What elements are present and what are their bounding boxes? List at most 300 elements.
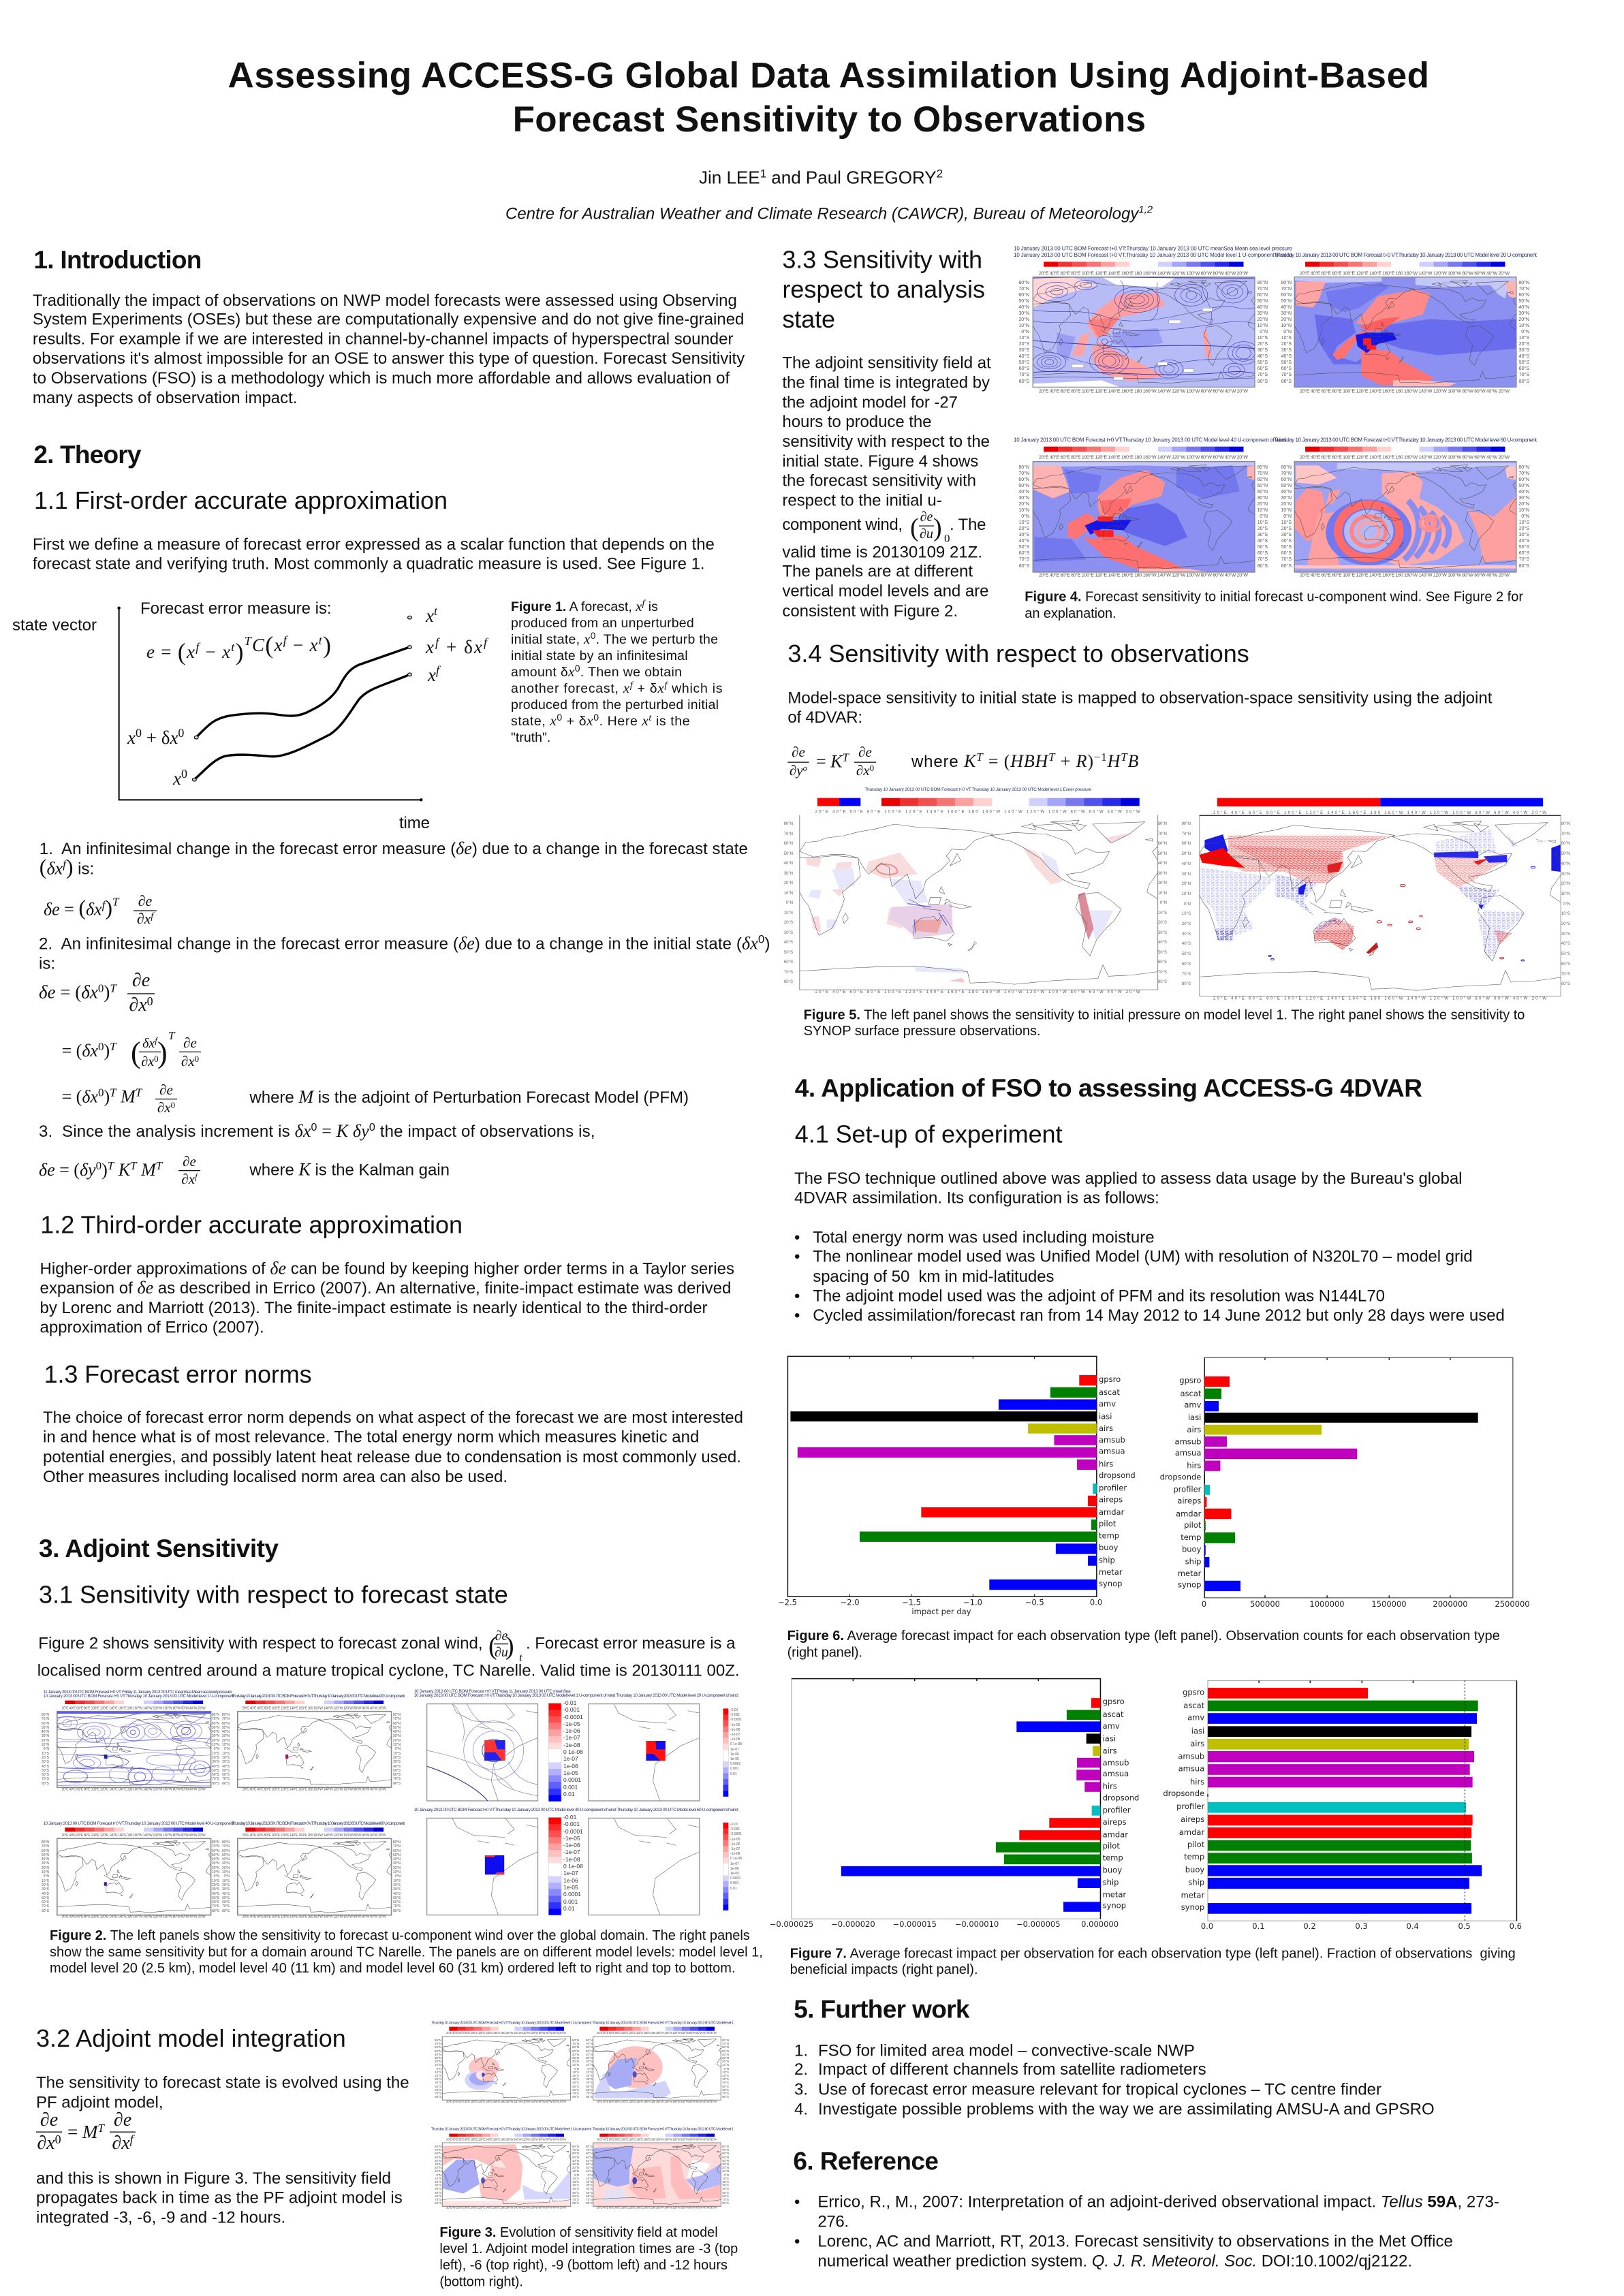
bar chart: impact per observation: airs [1103, 1746, 1117, 1756]
bar chart: average impact per day: 0.0 [1090, 1598, 1102, 1607]
figure 3: adjoint integration maps: 80°N 70°N 60°N 50°N 40°N 30°N 20°N 10°N 0°N 10°S 20°S 30°S 40°S 50°S 60°S 70°S 80°S [722, 2039, 729, 2098]
caption: figure 1: . The we perturb the [596, 632, 718, 647]
formula: error measure: − [200, 642, 221, 662]
text block: analysis state sensitivity: ( [910, 514, 919, 542]
bar chart: impact per observation: buoy [1103, 1865, 1122, 1874]
list: further work: Impact of different channels from satellite radiometers [818, 2060, 1206, 2079]
map group: global panels: 20°E 40°E 60°E 80°E 100°E 120°E 140°E 160°E 180 160°W 140°W 120°W 100°W 80°W 60°W 40°W 20°W [62, 1915, 206, 1919]
formula: error measure: C [252, 635, 265, 655]
bar chart: impact per observation: 0.000000 [1081, 1919, 1119, 1929]
text block: item 1: f [63, 858, 67, 871]
map group: global panels: 20°E 40°E 60°E 80°E 100°E 120°E 140°E 160°E 180 160°W 140°W 120°W 100°W 80°W 60°W 40°W 20°W [243, 1834, 386, 1838]
bar chart: observation counts: 2000000 [1433, 1599, 1468, 1609]
bar chart: average impact per day: gpsro [1099, 1374, 1121, 1384]
formula: kalman gain: T [156, 1159, 163, 1172]
list: further work: FSO for limited area model – convective-scale NWP [818, 2041, 1195, 2060]
formula: error measure: x [222, 642, 230, 662]
figure 3: adjoint integration maps: 80°N 70°N 60°N 50°N 40°N 30°N 20°N 10°N 0°N 10°S 20°S 30°S 40°S 50°S 60°S 70°S 80°S [572, 2145, 579, 2205]
map: sensitivity to initial pressure: 80°N 70°N 60°N 50°N 40°N 30°N 20°N 10°N 0°N 10°S 20°S 30°S 40°S 50°S 60°S 70°S 80°S [784, 822, 793, 984]
labels: curve end points: + δ [142, 727, 170, 748]
figure 6: impact bar charts [778, 1356, 1530, 1616]
figure 7: per-observation impact bar charts [770, 1679, 1522, 1931]
bar chart: fraction of beneficial observations: ascat [1183, 1701, 1205, 1710]
formula: observation sensitivity: B [1128, 751, 1139, 771]
figure 3: adjoint integration maps: 80°N 70°N 60°N 50°N 40°N 30°N 20°N 10°N 0°N 10°S 20°S 30°S 40°S 50°S 60°S 70°S 80°S [722, 2145, 729, 2205]
affiliation: 1,2 [1138, 204, 1153, 216]
formula: item 2 chain rule: ) [104, 982, 110, 1003]
bar chart: observation counts: ascat [1180, 1389, 1202, 1398]
caption: figure 1: x [586, 712, 593, 729]
bar chart: fraction of beneficial observations: hirs [1190, 1777, 1204, 1787]
caption: figure 1: which is [668, 681, 723, 696]
labels: curve end points [127, 604, 489, 789]
labels: curve end points: 0 [181, 767, 187, 781]
text block: forecast error norms: potential energies, and possibly latent heat release due to condensation is most commonly used. [43, 1448, 741, 1466]
text block: item 3: the impact of observations is, [375, 1122, 595, 1141]
bar chart: average impact per day: aireps [1099, 1495, 1123, 1505]
bar chart: impact per observation: amv [1103, 1721, 1120, 1731]
bar chart: impact per observation: ascat [1103, 1710, 1124, 1719]
panel: introduction [33, 246, 745, 407]
bar chart: average impact per day: airs [1099, 1424, 1113, 1433]
labels: curve end points: t [434, 604, 438, 618]
text block: figure 2 intro: localised norm centred around a mature tropical cyclone, TC Narelle. Valid time is 20130111 00Z. [37, 1662, 740, 1680]
-12h field [593, 2143, 721, 2206]
formula: item 2 chain rule: δe = (δx [39, 982, 98, 1003]
formula: item 1: ) [105, 895, 112, 919]
bar chart: average impact per day: amv [1099, 1399, 1116, 1409]
list: references: Errico, R., M., 2007: Interpretation of an adjoint-derived observational impact. Tellus 59A, 273- [817, 2192, 1499, 2211]
text block: adjoint model integration: f [130, 2133, 136, 2146]
bar chart: fraction of beneficial observations: aireps [1181, 1814, 1204, 1824]
heading: 3.2: 3.2 Adjoint model integration [36, 2024, 346, 2052]
text block: item 1: (δx [40, 855, 63, 879]
bar chart: fraction of beneficial observations: airs [1190, 1739, 1204, 1748]
caption: figure 1: is the [652, 714, 690, 729]
bar chart: observation counts: buoy [1182, 1545, 1202, 1554]
bar chart: impact per observation: −0.000020 [831, 1919, 875, 1929]
bar chart: fraction of beneficial observations: iasi [1191, 1726, 1204, 1735]
text block: analysis state sensitivity: consistent with Figure 2. [782, 602, 958, 620]
caption: figure 1: f [642, 599, 646, 609]
formula: observation sensitivity: T [1121, 751, 1128, 764]
formula: observation sensitivity: o [803, 763, 808, 773]
map group: global panels: 20°E 40°E 60°E 80°E 100°E 120°E 140°E 160°E 180 160°W 140°W 120°W 100°W 80°W 60°W 40°W 20°W [243, 1915, 386, 1919]
list: experiment configuration: • [794, 1248, 800, 1265]
labels: curve end points: f [435, 635, 441, 649]
text block: forecast error norms: The choice of forecast error norm depends on what aspect of the forecast we are most interested [43, 1409, 743, 1427]
text block: third-order approximation: expansion of δe as described in Errico (2007). An alternative, finite-impact estimate was derived [40, 1278, 731, 1298]
formula: observation sensitivity: ∂y [790, 762, 803, 779]
bar chart: impact per observation: pilot [1103, 1841, 1120, 1851]
caption: figure 1: 0 [591, 630, 596, 641]
map group: TC Narelle regional panels: -0.01 -0.001 -0.0001 -1e-05 -1e-06 -1e-07 -1e-08 0 1e-08 1e-07 1e-06 1e-05 0.0001 0.001 0.01 [730, 1708, 742, 1776]
text block: figure 2 intro: t [519, 1651, 523, 1664]
bar chart: observation counts: aireps [1177, 1496, 1201, 1506]
text block: forecast error measure [33, 535, 715, 573]
bar chart: impact per observation: hirs [1103, 1782, 1117, 1791]
figure 3: adjoint integration maps: 20°E 40°E 60°E 80°E 100°E 120°E 140°E 160°E 180 160°W 140°W 120°W 100°W 80°W 60°W 40°W 20°W [597, 2205, 717, 2209]
text block: analysis state sensitivity: vertical model levels and are [782, 582, 989, 601]
text block: third-order approximation: by Lorenc and Marriott (2013). The finite-impact estimate is nearly identical to the third-order [40, 1299, 707, 1317]
bar chart: fraction of beneficial observations: 0.4 [1407, 1921, 1419, 1931]
text block: model space to observation space: of 4DVAR: [787, 708, 862, 727]
figure 4: sensitivity to initial wind maps: 80°N 70°N 60°N 50°N 40°N 30°N 20°N 10°N 0°N 10°S 20°S 30°S 40°S 50°S 60°S 70°S 80°S [1257, 281, 1268, 384]
text block: analysis state sensitivity: the final time is integrated by [782, 374, 990, 392]
list: experiment configuration: The adjoint model used was the adjoint of PFM and its resolution was N144L70 [813, 1287, 1385, 1306]
formula: kalman gain: M [137, 1160, 157, 1180]
heading: 1.1: 1.1 First-order accurate approximation [34, 486, 448, 514]
formula: item 2 chain rule: ) [157, 1036, 168, 1069]
figure 4: sensitivity to initial wind maps: 10 January 2013 00 UTC BOM Forecast t+0 VT:Thursday 10 January 2013 00 UTC Model level 40 U-component of wind [1014, 437, 1286, 443]
list: further work: Use of forecast error measure relevant for tropical cyclones – TC centre finder [818, 2080, 1381, 2098]
text block: figure 2 intro: Figure 2 shows sensitivity with respect to forecast zonal wind, [38, 1635, 483, 1652]
caption: figure 1: initial state, x [511, 631, 590, 647]
map: sensitivity to initial pressure: 80°N 70°N 60°N 50°N 40°N 30°N 20°N 10°N 0°N 10°S 20°S 30°S 40°S 50°S 60°S 70°S 80°S [1158, 822, 1167, 984]
formula: error measure: f [196, 640, 201, 654]
formula: item 2 chain rule: 0 [147, 994, 153, 1008]
bar chart: fraction of beneficial observations: 0.6 [1510, 1921, 1522, 1931]
heading: 3.3: 3.3 Sensitivity with [782, 246, 982, 274]
formula: observation sensitivity: H [1107, 751, 1121, 771]
map group: global panels: 80°N 70°N 60°N 50°N 40°N 30°N 20°N 10°N 0°N 10°S 20°S 30°S 40°S 50°S 60°S 70°S 80°S [212, 1713, 219, 1786]
figure 4: sensitivity to initial wind maps: 20°E 40°E 60°E 80°E 100°E 120°E 140°E 160°E 180 160°W 140°W 120°W 100°W 80°W 60°W 40°W 20°W [1300, 454, 1510, 460]
panel: application of FSO [770, 1074, 1530, 1977]
bar chart: fraction of beneficial observations: amsub [1178, 1752, 1204, 1761]
bar chart: fraction of beneficial observations: gpsro [1183, 1688, 1204, 1697]
caption: figure 1: x [641, 712, 649, 729]
text block: analysis state sensitivity: The adjoint sensitivity field at [782, 354, 991, 372]
figure 3: adjoint integration maps: 80°N 70°N 60°N 50°N 40°N 30°N 20°N 10°N 0°N 10°S 20°S 30°S 40°S 50°S 60°S 70°S 80°S [435, 2039, 441, 2098]
bar chart: observation counts: airs [1187, 1425, 1201, 1434]
caption: figure 1: another forecast, x [511, 680, 629, 696]
text block: adjoint model integration: 0 [55, 2133, 61, 2146]
list: experiment configuration: • [794, 1228, 800, 1246]
list: further work: Investigate possible problems with the way we are assimilating AMSU-A and GPSRO [818, 2100, 1435, 2118]
map group: global panels: 20°E 40°E 60°E 80°E 100°E 120°E 140°E 160°E 180 160°W 140°W 120°W 100°W 80°W 60°W 40°W 20°W [243, 1787, 386, 1791]
list: references: • [794, 2192, 800, 2211]
bar chart: impact per observation: dropsond [1103, 1793, 1139, 1803]
text block: item 1: is: [78, 860, 94, 879]
text block: analysis state sensitivity: ∂e [920, 509, 933, 524]
caption: figure 6: (right panel). [787, 1645, 862, 1660]
bar chart: fraction of beneficial observations: 0.3 [1355, 1921, 1368, 1931]
text block: item 3: K δy [336, 1121, 369, 1141]
text block: analysis state sensitivity: initial state. Figure 4 shows [782, 452, 978, 471]
bar chart: average impact per day: ship [1099, 1556, 1115, 1565]
labels: curve end points: x [170, 727, 178, 748]
formula: item 2 chain rule: T [136, 1086, 143, 1099]
map: sensitivity to initial pressure: 20°E 40°E 60°E 80°E 100°E 120°E 140°E 160°E 180 160°W 140°W 120°W 100°W 80°W 60°W 40°W 20°W [815, 810, 1140, 814]
figure 4: sensitivity to initial wind maps: 80°N 70°N 60°N 50°N 40°N 30°N 20°N 10°N 0°N 10°S 20°S 30°S 40°S 50°S 60°S 70°S 80°S [1518, 281, 1529, 384]
labels: curve end points: f [484, 635, 489, 649]
panel: sensitivity to observations [783, 640, 1572, 1039]
text block: introduction body: results. For example if we are interested in channel-by-channel impacts of hyperspectral sounder [33, 330, 733, 348]
heading: 3.4: 3.4 Sensitivity with respect to observations [787, 640, 1249, 667]
labels: curve end points: x [173, 768, 181, 789]
formula: observation sensitivity [787, 744, 1139, 779]
bar chart: impact per observation: profiler [1103, 1806, 1131, 1815]
labels: curve end points: x [127, 727, 136, 748]
text block: adjoint model integration: propagates back in time as the PF adjoint model is [36, 2189, 403, 2207]
text block: analysis state sensitivity: . The [950, 516, 986, 534]
formula: item 1: T [112, 895, 120, 909]
formula: kalman gain: f [195, 1171, 199, 1182]
map group: global panels: 20°E 40°E 60°E 80°E 100°E 120°E 140°E 160°E 180 160°W 140°W 120°W 100°W 80°W 60°W 40°W 20°W [62, 1787, 206, 1791]
formula: item 1: δe = (δx [44, 895, 102, 919]
formula: error measure: ) [235, 638, 243, 665]
bar chart: average impact per day: buoy [1099, 1543, 1119, 1552]
formula: observation sensitivity: ∂e [792, 744, 805, 760]
bar chart: impact per observation: amsub [1103, 1758, 1129, 1767]
map: sensitivity to SYNOP pressure: 80°N 70°N 60°N 50°N 40°N 30°N 20°N 10°N 0°N 10°S 20°S 30°S 40°S 50°S 60°S 70°S 80°S [1561, 822, 1570, 986]
caption: figure 7: beneficial impacts (right panel). [790, 1962, 978, 1977]
figure 3: adjoint integration maps: 80°N 70°N 60°N 50°N 40°N 30°N 20°N 10°N 0°N 10°S 20°S 30°S 40°S 50°S 60°S 70°S 80°S [586, 2039, 593, 2098]
map group: TC Narelle regional panels: -0.01 -0.001 -0.0001 -1e-05 -1e-06 -1e-07 -1e-08 0 1e-08 1e-07 1e-06 1e-05 0.0001 0.001 0.01 [563, 1699, 583, 1797]
formula: observation sensitivity: T [1048, 751, 1056, 764]
text block: model space to observation space [787, 689, 1493, 727]
bar chart: fraction of beneficial observations: ship [1188, 1877, 1204, 1887]
map group: global panels: 80°N 70°N 60°N 50°N 40°N 30°N 20°N 10°N 0°N 10°S 20°S 30°S 40°S 50°S 60°S 70°S 80°S [393, 1713, 401, 1786]
bar chart: average impact per day: temp [1099, 1530, 1119, 1540]
text block: analysis state sensitivity: hours to produce the [782, 413, 932, 431]
bar chart: observation counts: dropsonde [1160, 1473, 1201, 1482]
figure 3: adjoint integration maps [431, 2022, 734, 2209]
text block: introduction body [33, 292, 745, 407]
text block: item 1: ) [66, 855, 73, 879]
text block: introduction body: System Experiments (OSEs) but these are computationally expensive and do not give fine-grained [33, 311, 744, 329]
bar chart: observation counts: amsua [1175, 1448, 1201, 1458]
bar chart: average impact per day: −2.5 [778, 1598, 797, 1607]
text block: item 3: 0 [311, 1122, 317, 1133]
bar chart: impact per observation: amdar [1103, 1830, 1128, 1840]
list: references: numerical weather prediction system. Q. J. R. Meteorol. Soc. DOI:10.1002/qj2122. [817, 2252, 1412, 2270]
caption: figure 2: Figure 2. The left panels show the sensitivity to forecast u-component wind over the global domain. The right panels [50, 1928, 750, 1943]
panel: further work [794, 1996, 1435, 2118]
figure 3: adjoint integration maps: 80°N 70°N 60°N 50°N 40°N 30°N 20°N 10°N 0°N 10°S 20°S 30°S 40°S 50°S 60°S 70°S 80°S [435, 2145, 441, 2205]
heading: 1.3: 1.3 Forecast error norms [44, 1360, 312, 1388]
axis label: time: time [399, 814, 430, 832]
bar chart: average impact per day: dropsond [1099, 1471, 1136, 1480]
formula: observation sensitivity: ∂e [858, 744, 872, 760]
formula: kalman gain: T [108, 1159, 115, 1172]
formula: kalman gain: ) [102, 1160, 108, 1180]
caption: figure 1: "truth". [511, 730, 550, 745]
bar chart: average impact per day: hirs [1099, 1460, 1113, 1469]
map: level 20 [1294, 277, 1516, 387]
text block: figure 2 intro: ∂e [495, 1629, 508, 1644]
bar chart: average impact per day: amsua [1099, 1447, 1125, 1456]
bar chart: observation counts: amsub [1175, 1437, 1201, 1447]
bar chart: fraction of beneficial observations: metar [1181, 1891, 1204, 1900]
text block: adjoint model integration: PF adjoint model, [36, 2093, 163, 2111]
title: Forecast Sensitivity to Observations [513, 99, 1146, 140]
formula: observation sensitivity: = ( [984, 751, 1010, 771]
figure 3: adjoint integration maps: 20°E 40°E 60°E 80°E 100°E 120°E 140°E 160°E 180 160°W 140°W 120°W 100°W 80°W 60°W 40°W 20°W [597, 2138, 717, 2141]
formula: error measure: t [319, 633, 323, 647]
caption: figure 1: state, x [511, 712, 557, 729]
text block: third-order approximation: approximation of Errico (2007). [40, 1319, 264, 1336]
text block: analysis state sensitivity: 0 [944, 532, 950, 545]
axes [118, 607, 422, 801]
figure 4: sensitivity to initial wind maps: 20°E 40°E 60°E 80°E 100°E 120°E 140°E 160°E 180 160°W 140°W 120°W 100°W 80°W 60°W 40°W 20°W [1039, 454, 1248, 460]
formula: item 2 chain rule: ) [104, 1087, 110, 1106]
text block: analysis state sensitivity: the forecast sensitivity with [782, 471, 976, 490]
authors: 2 [937, 168, 943, 180]
formula: item 1: f [151, 911, 155, 922]
formula: observation sensitivity: + [1055, 751, 1076, 771]
bar chart: observation counts: metar [1178, 1569, 1202, 1578]
caption: figure 1: + δ [633, 681, 657, 696]
caption: figure 5: SYNOP surface pressure observations. [804, 1024, 1041, 1039]
figure 4: sensitivity to initial wind maps: 10 January 2013 00 UTC BOM Forecast t+0 VT:Thursday 10 January 2013 00 UTC Model level 1 U-component of wind [1014, 252, 1292, 258]
text block: figure 2 intro: . Forecast error measure is a [526, 1635, 736, 1652]
figure 3: adjoint integration maps: 80°N 70°N 60°N 50°N 40°N 30°N 20°N 10°N 0°N 10°S 20°S 30°S 40°S 50°S 60°S 70°S 80°S [572, 2039, 579, 2098]
caption: figure 1: 0 [575, 663, 580, 674]
bar chart: fraction of beneficial observations: amdar [1179, 1827, 1204, 1837]
formula: observation sensitivity: = K [816, 752, 843, 772]
formula: item 2 chain rule: T [110, 1040, 117, 1053]
text block: item 1: 1. An infinitesimal change in the forecast error measure (δe) due to a change in the forecast state [40, 838, 748, 858]
bar chart: observation counts: 1500000 [1371, 1599, 1407, 1609]
bar chart: average impact per day: −0.5 [1025, 1598, 1044, 1607]
map group: TC Narelle regional panels [414, 1689, 744, 1923]
caption: figure 1: t [649, 713, 652, 723]
list: further work: 3. [794, 2080, 808, 2098]
caption: figure 1: produced from the perturbed initial [511, 697, 719, 712]
bar chart: impact per observation: gpsro [1103, 1697, 1125, 1706]
text block: figure 2 intro: ) [505, 1632, 514, 1661]
bar chart: observation counts: profiler [1173, 1484, 1202, 1494]
figure 3: adjoint integration maps: 20°E 40°E 60°E 80°E 100°E 120°E 140°E 160°E 180 160°W 140°W 120°W 100°W 80°W 60°W 40°W 20°W [446, 2205, 567, 2209]
figure 3: adjoint integration maps: 20°E 40°E 60°E 80°E 100°E 120°E 140°E 160°E 180 160°W 140°W 120°W 100°W 80°W 60°W 40°W 20°W [597, 2031, 717, 2034]
bar chart: observation counts: 1000000 [1309, 1599, 1345, 1609]
caption: figure 4 [1025, 590, 1523, 621]
text block: model space to observation space: Model-space sensitivity to initial state is mapped to observation-space sensitivity using the adjoint [787, 689, 1493, 708]
bar chart: impact per observation: synop [1103, 1901, 1126, 1910]
map: sensitivity to initial pressure: Thursday 10 January 2013 00 UTC BOM Forecast t+0 VT:Thursday 10 January 2013 00 UTC Model level 1 Exner pressure [864, 787, 1091, 792]
bar chart: average impact per day: pilot [1099, 1519, 1116, 1528]
map group: global panels: 80°N 70°N 60°N 50°N 40°N 30°N 20°N 10°N 0°N 10°S 20°S 30°S 40°S 50°S 60°S 70°S 80°S [222, 1840, 230, 1913]
figure 4: sensitivity to initial wind maps: 20°E 40°E 60°E 80°E 100°E 120°E 140°E 160°E 180 160°W 140°W 120°W 100°W 80°W 60°W 40°W 20°W [1300, 389, 1510, 394]
list: references: • [794, 2232, 800, 2250]
formula: item 2 chain rule: M [116, 1087, 136, 1106]
formula: item 2 chain rule: 0 [98, 1040, 104, 1053]
formula: item 2 chain rule: ( [131, 1036, 141, 1069]
caption: figure 1: produced from an unperturbed [511, 616, 694, 631]
formula: item 2 chain rule: ∂x [141, 1054, 154, 1069]
text block: analysis state sensitivity: ∂u [920, 526, 933, 541]
figure 3: adjoint integration maps: 20°E 40°E 60°E 80°E 100°E 120°E 140°E 160°E 180 160°W 140°W 120°W 100°W 80°W 60°W 40°W 20°W [446, 2100, 567, 2103]
text block: item 3: = [317, 1121, 337, 1141]
labels: curve end points: x [474, 637, 482, 657]
text block: analysis state sensitivity: component wind, [782, 516, 903, 534]
formula: kalman gain: 0 [96, 1159, 102, 1172]
bar chart: average impact per day: amdar [1099, 1507, 1125, 1517]
bar chart: fraction of beneficial observations: pilot [1187, 1840, 1205, 1849]
figure 4: sensitivity to initial wind maps: 20°E 40°E 60°E 80°E 100°E 120°E 140°E 160°E 180 160°W 140°W 120°W 100°W 80°W 60°W 40°W 20°W [1300, 270, 1510, 276]
text block: introduction body: Traditionally the impact of observations on NWP model forecasts were assessed using Observing [33, 292, 737, 310]
bar chart: fraction of beneficial observations: amsua [1178, 1764, 1204, 1774]
caption: figure 3 [439, 2225, 738, 2289]
formula: item 2 chain rule: ∂x [129, 994, 147, 1016]
formula: item 2 chain rule: 0 [154, 1054, 159, 1064]
caption: figure 1: initial state by an infinitesimal [511, 648, 688, 663]
bar chart: average impact per day: iasi [1099, 1411, 1112, 1421]
caption: figure 3: level 1. Adjoint model integration times are -3 (top [439, 2242, 738, 2256]
formula: observation sensitivity: T [976, 751, 984, 764]
bar chart: impact per observation: −0.000025 [770, 1919, 813, 1929]
bar chart: observation counts: temp [1181, 1532, 1201, 1542]
map group: global panels: 20°E 40°E 60°E 80°E 100°E 120°E 140°E 160°E 180 160°W 140°W 120°W 100°W 80°W 60°W 40°W 20°W [62, 1706, 206, 1710]
heading: 1.2: 1.2 Third-order accurate approximation [40, 1211, 463, 1239]
map group: global panels: 20°E 40°E 60°E 80°E 100°E 120°E 140°E 160°E 180 160°W 140°W 120°W 100°W 80°W 60°W 40°W 20°W [243, 1706, 386, 1710]
text block: third-order approximation: Higher-order approximations of δe can be found by keeping higher order terms in a Taylor series [40, 1258, 734, 1278]
title: Assessing ACCESS-G Global Data Assimilation Using Adjoint-Based [228, 56, 1429, 95]
bar chart: impact per observation: amsua [1103, 1769, 1129, 1778]
formula: item 2 chain rule: ∂x [181, 1053, 195, 1069]
authors: Jin LEE [699, 168, 760, 188]
bar chart: observation counts: 500000 [1250, 1599, 1280, 1609]
map group: global panels: 10 January 2013 00 UTC BOM Forecast t+0 VT:Thursday 10 January 2013 00 UTC Model level 1 U-component [44, 1694, 234, 1699]
list: further work: 2. [794, 2060, 808, 2079]
text block: adjoint model integration: T [97, 2122, 105, 2135]
bar chart: fraction of beneficial observations: profiler [1176, 1802, 1204, 1811]
text block: forecast error norms [43, 1409, 743, 1486]
text block: adjoint model integration: ∂e [114, 2109, 131, 2130]
text block: item 3: 0 [369, 1122, 375, 1133]
formula: item 1: ∂x [137, 910, 151, 927]
figure 4: sensitivity to initial wind maps: 20°E 40°E 60°E 80°E 100°E 120°E 140°E 160°E 180 160°W 140°W 120°W 100°W 80°W 60°W 40°W 20°W [1039, 389, 1248, 394]
text block: adjoint model integration: = M [67, 2122, 97, 2142]
formula: item 2 chain rule: ∂x [157, 1099, 171, 1116]
map: level 60 [1294, 462, 1516, 572]
formula: observation sensitivity: −1 [1094, 751, 1107, 764]
map group: global panels: 10 January 2013 00 UTC BOM Forecast t+0 VT:Thursday 10 January 2013 00 UTC Model level 40 U-component [44, 1821, 234, 1826]
map group: TC Narelle regional panels: -0.01 -0.001 -0.0001 -1e-05 -1e-06 -1e-07 -1e-08 0 1e-08 1e-07 1e-06 1e-05 0.0001 0.001 0.01 [563, 1814, 583, 1912]
bar chart: impact per observation: −0.000005 [1016, 1919, 1061, 1929]
formula: observation sensitivity: R) [1076, 751, 1093, 771]
map group: global panels: 80°N 70°N 60°N 50°N 40°N 30°N 20°N 10°N 0°N 10°S 20°S 30°S 40°S 50°S 60°S 70°S 80°S [212, 1840, 219, 1913]
figure 4: sensitivity to initial wind maps [1014, 246, 1537, 578]
text block: figure 2 intro: ( [488, 1632, 497, 1661]
list: references: 276. [817, 2212, 849, 2231]
list: references [794, 2192, 1499, 2270]
text block: analysis state sensitivity: ) [933, 514, 942, 542]
formula: error measure: x [186, 642, 195, 662]
formula: item 2 chain rule: 0 [98, 982, 104, 994]
map group: TC Narelle regional panels: 10 January 2013 00 UTC BOM Forecast t+0 VT:Friday 11 January 2013 00 UTC meanSea [414, 1689, 571, 1694]
caption: figure 1: amount δx [511, 663, 574, 680]
bar chart: observation counts: amdar [1176, 1509, 1202, 1519]
formula: item 2 chain rule: T [110, 982, 117, 994]
heading: 4.: 4. Application of FSO to assessing ACCESS-G 4DVAR [795, 1074, 1422, 1102]
text block: third-order approximation [40, 1258, 734, 1336]
figure 4: sensitivity to initial wind maps: 80°N 70°N 60°N 50°N 40°N 30°N 20°N 10°N 0°N 10°S 20°S 30°S 40°S 50°S 60°S 70°S 80°S [1257, 465, 1268, 568]
panel: sensitivity to analysis state [782, 246, 1537, 621]
map: level 1 with pressure contours [1033, 277, 1260, 387]
caption: figure 1: + δ [563, 714, 587, 729]
text block: forecast error norms: in and hence what is of most relevance. The total energy norm which measures kinetic and [43, 1428, 699, 1447]
text block: analysis state sensitivity [782, 354, 991, 620]
map group: global panels: 20°E 40°E 60°E 80°E 100°E 120°E 140°E 160°E 180 160°W 140°W 120°W 100°W 80°W 60°W 40°W 20°W [62, 1834, 206, 1838]
formula: error measure: e = [146, 642, 171, 662]
map group: global panels: 80°N 70°N 60°N 50°N 40°N 30°N 20°N 10°N 0°N 10°S 20°S 30°S 40°S 50°S 60°S 70°S 80°S [42, 1713, 49, 1786]
text block: analysis state sensitivity: valid time is 20130109 21Z. [782, 543, 982, 561]
list: experiment configuration [794, 1228, 1505, 1325]
figure 4: sensitivity to initial wind maps: 20°E 40°E 60°E 80°E 100°E 120°E 140°E 160°E 180 160°W 140°W 120°W 100°W 80°W 60°W 40°W 20°W [1039, 270, 1248, 276]
labels: curve end points: x [426, 637, 434, 657]
